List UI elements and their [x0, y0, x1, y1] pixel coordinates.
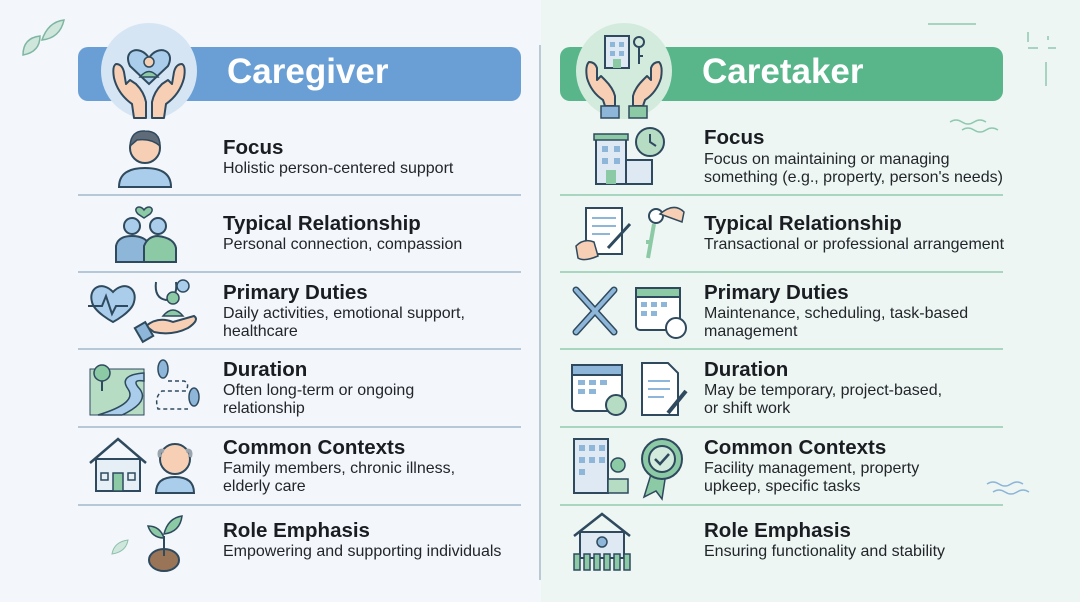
text: role emphasis: Role Emphasis [223, 519, 370, 542]
text: typical relationship: Typical Relationship [704, 212, 902, 235]
row: caretaker contexts: upkeep, specific tasks [704, 478, 861, 495]
text: primary duties: Primary Duties [704, 281, 849, 304]
row: caretaker relationship [575, 206, 1004, 260]
panel: caretaker rows [560, 194, 1003, 506]
title: Caregiver: Caregiver [227, 52, 388, 91]
icon: house with fence [573, 512, 631, 571]
row: caregiver focus [118, 130, 454, 188]
decorative waves lower right [986, 481, 1030, 495]
icon: tools calendar [572, 286, 687, 339]
icon: calendar document [571, 362, 688, 416]
decorative waves right [950, 119, 998, 133]
row: caregiver duration: relationship [223, 400, 305, 417]
row: caretaker role emphasis [573, 512, 945, 571]
panel: caregiver rows [78, 194, 521, 506]
text: focus: Focus [223, 136, 283, 159]
text: primary duties: Primary Duties [223, 281, 368, 304]
row: caregiver focus: Holistic person-centered support [223, 160, 453, 177]
icon: contract and keys [575, 206, 685, 260]
icon: river path footprints [90, 359, 200, 416]
row: caregiver contexts: elderly care [223, 478, 306, 495]
row: caregiver duties: healthcare [223, 323, 298, 340]
row: caregiver duration [90, 358, 414, 417]
icon: sprout [111, 515, 183, 572]
icon: building badge [573, 438, 683, 501]
icon: embrace [115, 206, 177, 263]
decorative corner lines top-right [928, 23, 1056, 86]
text: typical relationship: Typical Relationship [223, 212, 421, 235]
decorative leaf top-left [22, 19, 65, 56]
row: caretaker duties: management [704, 323, 797, 340]
row: caretaker focus: something (e.g., property, person's needs) [704, 169, 1003, 186]
row: caretaker duties: Maintenance, scheduling, task-based [704, 305, 968, 322]
panel: caretaker header [560, 23, 1003, 119]
text: common contexts: Common Contexts [704, 436, 886, 459]
row: caretaker contexts [573, 436, 920, 501]
text: role emphasis: Role Emphasis [704, 519, 851, 542]
row: caregiver role emphasis: Empowering and supporting individuals [223, 543, 501, 560]
row: caretaker focus [593, 126, 1003, 186]
icon: heart and care hand [88, 279, 197, 344]
row: caretaker focus: Focus on maintaining or managing [704, 151, 949, 168]
text: focus: Focus [704, 126, 764, 149]
row: caregiver relationship: Personal connection, compassion [223, 236, 462, 253]
icon: hands building keys [576, 23, 672, 119]
row: caretaker duration: May be temporary, project-based, [704, 382, 942, 399]
row: caregiver role emphasis [111, 515, 501, 572]
row: caretaker contexts: Facility management, property [704, 460, 919, 477]
icon: building clock [593, 127, 665, 185]
row: caregiver relationship [115, 206, 462, 263]
text: duration: Duration [223, 358, 307, 381]
panel: caregiver header [78, 23, 521, 119]
icon: caring hands heart [101, 23, 197, 119]
title: Caretaker: Caretaker [702, 52, 864, 91]
text: duration: Duration [704, 358, 788, 381]
icon: person [118, 130, 172, 188]
row: caregiver contexts [89, 436, 455, 495]
row: caretaker duration: or shift work [704, 400, 790, 417]
row: caregiver duties [88, 279, 465, 344]
row: caretaker role emphasis: Ensuring functionality and stability [704, 543, 945, 560]
row: caretaker duties [572, 281, 968, 340]
row: caregiver duration: Often long-term or ongoing [223, 382, 414, 399]
row: caregiver duties: Daily activities, emotional support, [223, 305, 465, 322]
icon: house and elder [89, 438, 195, 494]
row: caregiver contexts: Family members, chronic illness, [223, 460, 455, 477]
row: caretaker duration [571, 358, 942, 417]
row: caretaker relationship: Transactional or professional arrangement [704, 236, 1004, 253]
text: common contexts: Common Contexts [223, 436, 405, 459]
